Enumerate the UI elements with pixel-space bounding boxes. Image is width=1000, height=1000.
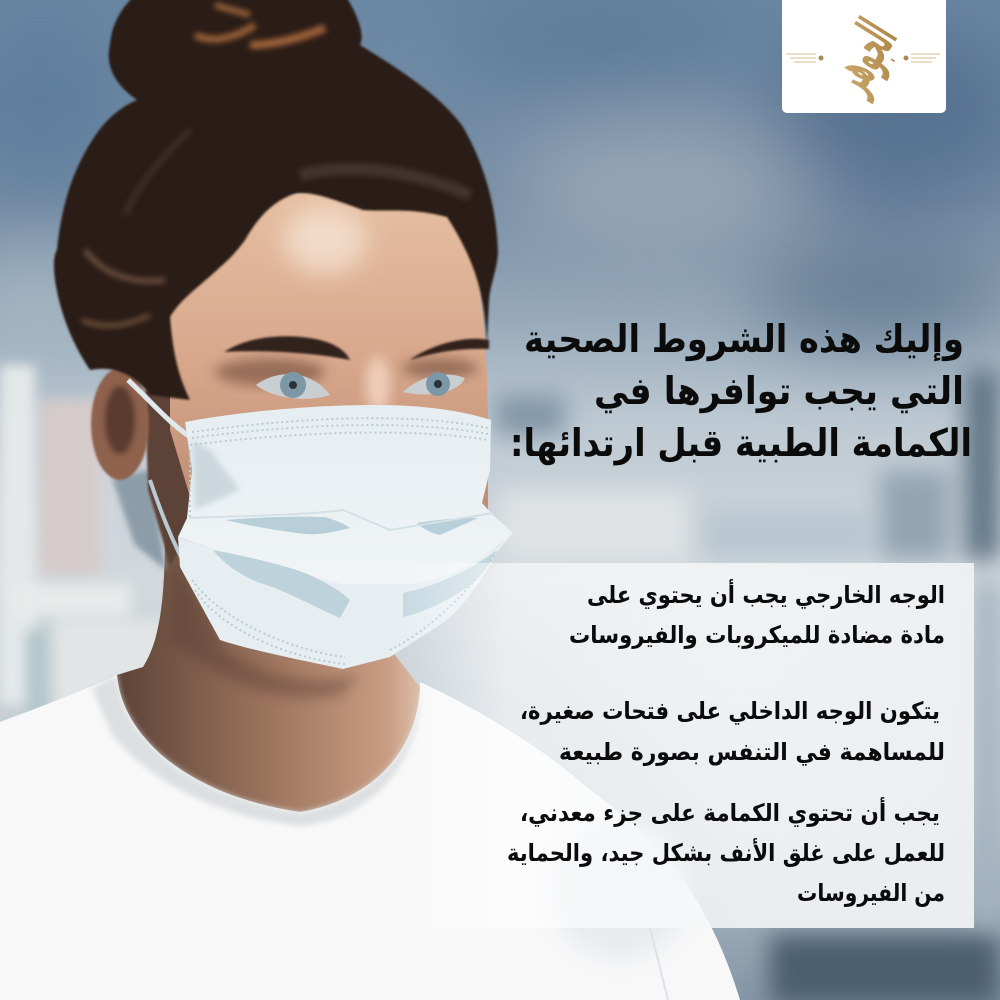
ear (91, 368, 149, 480)
collar shadow (92, 675, 421, 826)
logo: right ornament (904, 54, 940, 62)
hair highlights (82, 5, 470, 325)
logo card (782, 0, 946, 113)
point 3: من الفيروسات (797, 879, 945, 907)
eyebrows (224, 336, 489, 360)
lower fold shadow right (403, 550, 497, 617)
point 2: يتكون الوجه الداخلي على فتحات صغيرة، (520, 697, 940, 725)
logo: left ornament (786, 54, 824, 62)
ear loops (128, 380, 195, 440)
hair mass and bun (54, 0, 498, 400)
point 3: يجب أن تحتوي الكمامة على جزء معدني، (520, 797, 940, 827)
woman: hair, face, neck (54, 0, 498, 812)
mask stitching (190, 418, 495, 664)
face mask (128, 380, 513, 669)
nose bridge highlight (366, 357, 390, 413)
top fold shadow right (417, 518, 478, 535)
face (170, 192, 488, 530)
eyes (256, 372, 465, 399)
panel: translucent text box (390, 563, 974, 928)
forehead highlight (283, 206, 367, 274)
white t-shirt (0, 675, 740, 1000)
mask side shade (192, 440, 240, 510)
mask top panel (178, 405, 513, 584)
point 3 (507, 797, 945, 907)
heading (510, 317, 972, 465)
point 1: الوجه الخارجي يجب أن يحتوي على (587, 579, 945, 609)
point 1: مادة مضادة للميكروبات والفيروسات (569, 621, 945, 649)
top panel shadow edge (189, 510, 493, 530)
point 3: للعمل على غلق الأنف بشكل جيد، والحماية (507, 838, 945, 867)
neck (117, 530, 422, 812)
point 2 (520, 697, 945, 766)
wisps of hair behind neck (112, 470, 166, 570)
mask lower body (178, 533, 513, 669)
cheek and jaw shadow (145, 390, 195, 565)
top fold shadow left (225, 517, 350, 534)
heading: التي يجب توافرها في (594, 369, 964, 413)
point 2: للمساهمة في التنفس بصورة طبيعة (559, 738, 945, 766)
eye socket shadow (215, 358, 478, 386)
point 1 (569, 579, 945, 649)
lower fold shadow left (213, 550, 350, 618)
neck shadow under mask (170, 560, 360, 698)
